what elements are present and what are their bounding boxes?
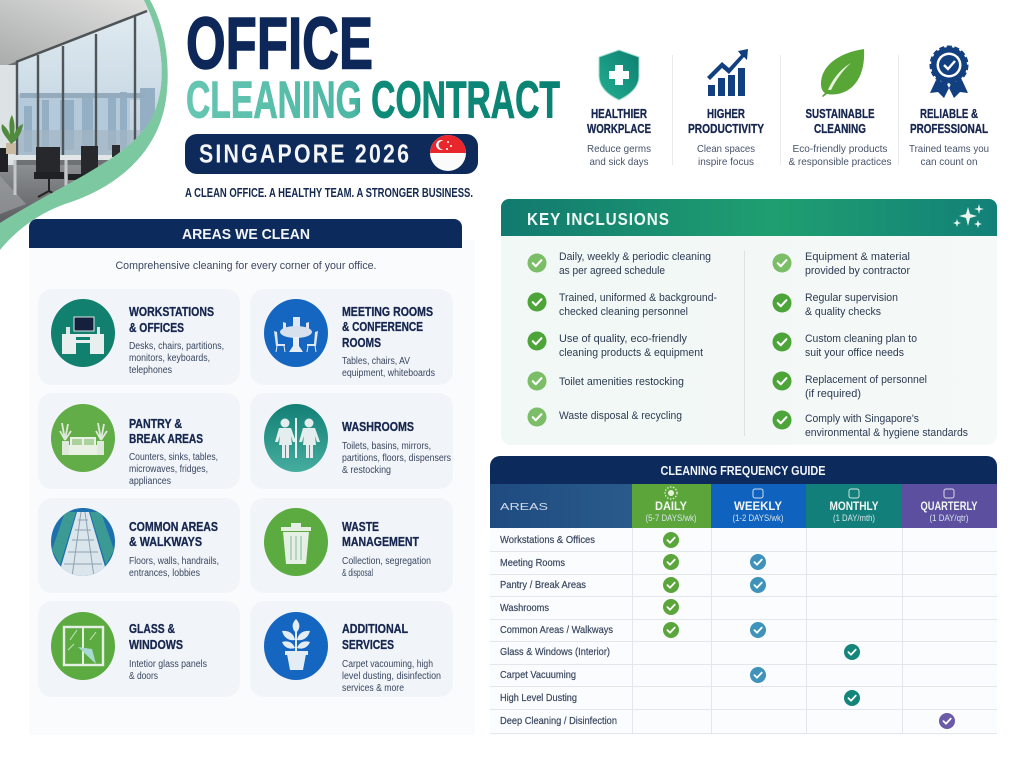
- inclusion list: left: as per agreed schedule: [559, 265, 665, 277]
- inclusion list: right: Regular supervision: [805, 292, 898, 304]
- icon: leaf: [821, 49, 864, 97]
- card: workstations: [38, 289, 240, 385]
- heading: areas we clean: AREAS WE CLEAN: [182, 226, 310, 243]
- column header: daily: DAILY: [655, 501, 687, 513]
- card: workstations: Desks, chairs, partitions,: [129, 341, 224, 352]
- inclusion list: left: Daily, weekly & periodic cleaning: [559, 251, 711, 263]
- column header: monthly: [806, 484, 902, 528]
- card: additional services: ADDITIONAL: [342, 621, 408, 636]
- column header: quarterly: QUARTERLY: [920, 501, 978, 513]
- card: pantry: microwaves, fridges,: [129, 464, 208, 475]
- card: additional services: services & more: [342, 683, 404, 694]
- heading: key inclusions: [501, 199, 997, 236]
- inclusion list: right: (if required): [805, 388, 861, 400]
- table row labels: Glass & Windows (Interior): [500, 646, 610, 658]
- table row labels: Deep Cleaning / Disinfection: [500, 715, 617, 727]
- benefit: healthier workplace: HEALTHIER: [591, 107, 647, 121]
- column header: quarterly: [902, 484, 997, 528]
- card: glass and windows: GLASS &: [129, 621, 175, 636]
- card: washrooms: WASHROOMS: [342, 419, 414, 434]
- card: waste management: WASTE: [342, 519, 379, 534]
- card: waste management: & disposal: [342, 568, 373, 579]
- icon: conference table: [264, 299, 328, 367]
- column header: weekly: [711, 484, 806, 528]
- icon: sparkles: [953, 204, 984, 228]
- icon: washroom figures: [264, 404, 328, 472]
- heading: frequency guide: [490, 456, 997, 484]
- benefit: reliable and professional: [909, 47, 989, 168]
- inclusion list: left: checked cleaning personnel: [559, 306, 688, 318]
- icon: walkway: [51, 508, 115, 577]
- title: OFFICE: [186, 4, 373, 84]
- benefit: sustainable cleaning: [788, 49, 892, 168]
- title: CLEANING CONTRACT: [186, 72, 560, 130]
- benefits row: [587, 47, 989, 168]
- column header: weekly: (1-2 DAYS/wk): [732, 513, 784, 523]
- icon: singapore flag: [430, 135, 466, 171]
- card: pantry: BREAK AREAS: [129, 431, 203, 446]
- heading: frequency guide: CLEANING FREQUENCY GUIDE: [660, 464, 826, 478]
- inclusion list: right: Custom cleaning plan to: [805, 333, 917, 345]
- column header: weekly: WEEKLY: [734, 501, 782, 513]
- table row labels: [500, 534, 617, 727]
- card: glass and windows: Intetior glass panels: [129, 659, 207, 670]
- inclusion list: left: Trained, uniformed & background-: [559, 292, 717, 304]
- inclusion list: left: Toilet amenities restocking: [559, 376, 684, 388]
- card: common areas: entrances, lobbies: [129, 568, 200, 579]
- card: meeting rooms: Tables, chairs, AV: [342, 356, 410, 367]
- card: pantry: appliances: [129, 476, 171, 487]
- benefit: sustainable cleaning: CLEANING: [814, 122, 866, 136]
- benefit: sustainable cleaning: SUSTAINABLE: [806, 107, 874, 121]
- card: additional services: level dusting, disinfection: [342, 671, 441, 682]
- inclusion list: left: Use of quality, eco-friendly: [559, 333, 687, 345]
- table check marks: [663, 532, 955, 729]
- icon: growth chart: [707, 49, 748, 96]
- column header: monthly: (1 DAY/mth): [833, 513, 875, 523]
- benefit: sustainable cleaning: Eco-friendly products: [792, 143, 888, 155]
- benefit: higher productivity: HIGHER: [707, 107, 745, 121]
- card: common areas: & WALKWAYS: [129, 534, 202, 549]
- icon: potted plant: [264, 612, 328, 680]
- inclusion list: right: [772, 251, 968, 439]
- benefit: reliable and professional: RELIABLE &: [920, 107, 978, 121]
- card: common areas: [38, 498, 240, 593]
- inclusion list: right: suit your office needs: [805, 347, 904, 359]
- icon: trash bin: [264, 508, 328, 576]
- heading: key inclusions: KEY INCLUSIONS: [527, 209, 669, 229]
- card: waste management: Collection, segregation: [342, 556, 431, 567]
- card: glass and windows: & doors: [129, 671, 158, 682]
- card: glass and windows: [38, 601, 240, 697]
- icon: ribbon badge: [930, 80, 968, 98]
- inclusion list: right: Equipment & material: [805, 251, 910, 263]
- card: workstations: & OFFICES: [129, 320, 184, 335]
- tagline: A CLEAN OFFICE. A HEALTHY TEAM. A STRONGER BUSINESS.: [185, 186, 473, 200]
- benefit: healthier workplace: [587, 50, 651, 168]
- card: meeting rooms: [250, 289, 453, 385]
- card: additional services: SERVICES: [342, 637, 394, 652]
- card: washrooms: partitions, floors, dispensers: [342, 453, 451, 464]
- title: [186, 4, 560, 130]
- card: washrooms: [250, 393, 453, 489]
- panel: cleaning frequency guide: [490, 456, 997, 735]
- icon: shield: [599, 50, 639, 100]
- card: meeting rooms: MEETING ROOMS: [342, 304, 433, 319]
- panel: key inclusions: [501, 199, 997, 445]
- card: additional services: Carpet vacouming, high: [342, 659, 433, 670]
- inclusion list: right: Replacement of personnel: [805, 374, 927, 386]
- inclusion list: left: Waste disposal & recycling: [559, 410, 682, 422]
- column header: monthly: MONTHLY: [830, 501, 879, 513]
- benefit: higher productivity: PRODUCTIVITY: [688, 122, 765, 136]
- card: pantry: PANTRY &: [129, 416, 182, 431]
- green wave border: [0, 0, 168, 250]
- column header: daily: (5-7 DAYS/wk): [646, 513, 697, 523]
- card: workstations: monitors, keyboards,: [129, 353, 210, 364]
- benefit: higher productivity: inspire focus: [698, 156, 754, 168]
- card: pantry: [38, 393, 240, 489]
- icon: sofa and plants: [51, 404, 115, 472]
- card: common areas: Floors, walls, handrails,: [129, 556, 219, 567]
- card: waste management: MANAGEMENT: [342, 534, 419, 549]
- inclusion list: left: [528, 251, 717, 426]
- inclusion list: right: & quality checks: [805, 306, 881, 318]
- benefit: reliable and professional: PROFESSIONAL: [910, 122, 988, 136]
- benefit: healthier workplace: and sick days: [590, 156, 648, 168]
- card: waste management: [250, 498, 453, 593]
- icon: desk: [51, 299, 115, 367]
- card: pantry: Counters, sinks, tables,: [129, 452, 218, 463]
- benefit: higher productivity: [688, 49, 765, 168]
- card: workstations: WORKSTATIONS: [129, 304, 214, 319]
- card: meeting rooms: & CONFERENCE: [342, 319, 423, 334]
- table row labels: Workstations & Offices: [500, 534, 595, 546]
- table row labels: High Level Dusting: [500, 692, 577, 704]
- card: glass and windows: WINDOWS: [129, 637, 183, 652]
- benefit: sustainable cleaning: & responsible practices: [788, 156, 892, 168]
- table row labels: Carpet Vacuuming: [500, 669, 576, 681]
- table row labels: Meeting Rooms: [500, 557, 565, 569]
- column header: area: [490, 484, 632, 528]
- card: workstations: telephones: [129, 365, 172, 376]
- inclusion list: right: provided by contractor: [805, 265, 910, 277]
- benefit: healthier workplace: WORKPLACE: [587, 122, 651, 136]
- panel: areas we clean: [29, 219, 462, 697]
- inclusion list: right: Comply with Singapore's: [805, 413, 919, 425]
- card: additional services: [250, 601, 453, 697]
- column header: daily: [632, 484, 711, 528]
- column header: quarterly: (1 DAY/qtr): [930, 513, 968, 523]
- card: washrooms: Toilets, basins, mirrors,: [342, 441, 431, 452]
- icon: window: [51, 612, 115, 680]
- table row labels: Pantry / Break Areas: [500, 579, 586, 591]
- singapore 2026 pill: [185, 134, 478, 174]
- singapore 2026 pill: SINGAPORE 2026: [199, 140, 409, 169]
- inclusion list: right: environmental & hygiene standards: [805, 427, 968, 439]
- card: washrooms: & restocking: [342, 465, 391, 476]
- benefit: higher productivity: Clean spaces: [697, 143, 755, 155]
- benefit: reliable and professional: Trained teams you: [909, 143, 989, 155]
- inclusion list: left: cleaning products & equipment: [559, 347, 703, 359]
- hero photo: office with skyline view: [0, 0, 170, 250]
- subtitle: Comprehensive cleaning for every corner of your office.: [116, 260, 376, 272]
- column header: area: AREAS: [500, 502, 548, 513]
- table row labels: Common Areas / Walkways: [500, 624, 613, 636]
- card: common areas: COMMON AREAS: [129, 519, 218, 534]
- benefit: healthier workplace: Reduce germs: [587, 143, 651, 155]
- card: meeting rooms: equipment, whiteboards: [342, 368, 435, 379]
- table row labels: Washrooms: [500, 602, 549, 614]
- card: meeting rooms: ROOMS: [342, 335, 381, 350]
- benefit: reliable and professional: can count on: [920, 156, 978, 168]
- heading: areas we clean: [29, 219, 462, 248]
